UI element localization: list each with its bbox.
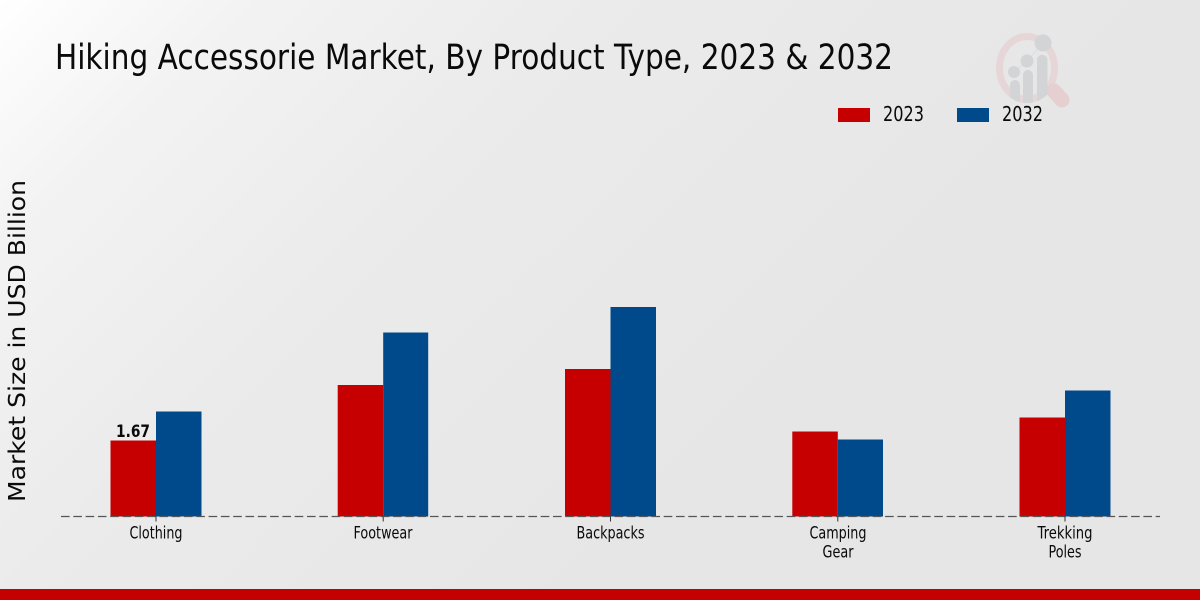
bars: Trekking Poles [1020,390,1110,516]
legend item: 2032: 2032 [1002,102,1043,126]
category: Camping Gear [810,524,866,562]
category: Trekking Poles: Trekking [1037,524,1092,542]
legend item: 2032 [957,102,1043,126]
legend item: 2023: 2023 [883,102,924,126]
category: Camping Gear: Camping [810,524,866,542]
category: Footwear: Footwear [354,524,413,542]
bars: Footwear [338,332,428,516]
bottom red band [0,589,1200,600]
category: Clothing: Clothing [130,524,182,542]
watermark logo icon [1000,34,1062,110]
legend [838,102,1043,126]
category: Trekking Poles [1037,524,1092,562]
y axis label: Market Size in USD Billion [3,180,31,502]
bars: Clothing [110,412,202,516]
bar chart [61,307,1160,562]
data label: 1.67: 1.67 [116,422,150,442]
category labels [130,524,1092,562]
title: Hiking Accessorie Market, By Product Type, 2023 & 2032 [55,38,893,78]
category: Backpacks: Backpacks [576,524,644,542]
legend item: 2023 [838,102,924,126]
category: Camping Gear: Gear [822,542,854,562]
category: Trekking Poles: Poles [1048,542,1082,562]
bars: Backpacks [565,307,656,516]
bars: Camping Gear [792,432,883,516]
